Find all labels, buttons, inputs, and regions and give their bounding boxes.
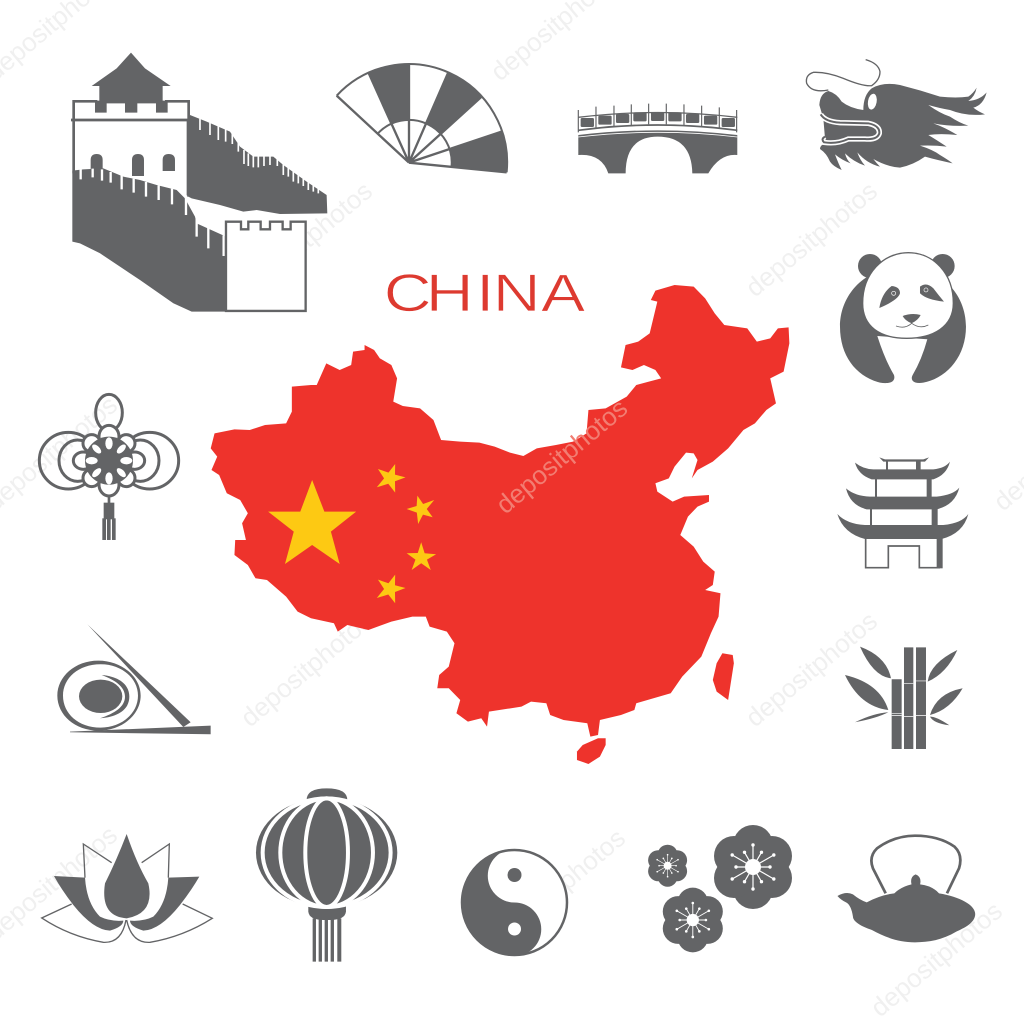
tower — [71, 53, 191, 197]
icon: yin yang — [461, 849, 567, 956]
infographic: China icons and map: depositphotos — [235, 176, 378, 303]
far wall section — [188, 115, 327, 214]
icon: folding fan — [337, 64, 507, 172]
sushi roll — [57, 661, 141, 731]
infographic: China icons and map: depositphotos — [865, 896, 1008, 1023]
small star 3 — [407, 542, 436, 570]
icon: arched bridge — [578, 104, 737, 173]
front tower — [226, 222, 306, 311]
near wall section — [72, 168, 226, 312]
icon: panda — [840, 253, 966, 383]
icon: Chinese knot — [39, 394, 179, 540]
small star 1 — [377, 464, 406, 493]
lower chopstick — [70, 726, 211, 734]
upper chopstick — [87, 624, 191, 727]
small star 4 — [377, 575, 406, 603]
icon: sushi roll and chopsticks — [57, 624, 211, 734]
icon: plum blossoms — [648, 825, 792, 952]
map of China with flag stars — [211, 285, 789, 764]
watermark on map: depositphotos — [490, 393, 633, 520]
infographic: China icons and map: depositphotos — [235, 606, 378, 733]
icon: teapot — [837, 836, 975, 942]
title: CHINA: CHINA — [384, 263, 585, 322]
Taiwan island — [713, 653, 734, 700]
large yellow star — [268, 480, 356, 564]
icon: lotus flower — [42, 834, 212, 942]
icon: dragon head — [806, 60, 987, 170]
icon: Great Wall — [71, 53, 327, 312]
infographic: China icons and map: depositphotos — [740, 176, 883, 303]
railing — [578, 104, 737, 132]
infographic: China icons and map: depositphotos — [488, 823, 631, 950]
small star 2 — [407, 496, 434, 524]
icon: pagoda — [837, 457, 968, 568]
infographic: China icons and map: depositphotos — [740, 606, 883, 733]
mainland silhouette — [211, 285, 789, 737]
icon: bamboo — [845, 647, 963, 749]
Hainan island — [577, 738, 606, 764]
icon: paper lantern — [256, 788, 397, 962]
bridge body — [578, 130, 737, 173]
